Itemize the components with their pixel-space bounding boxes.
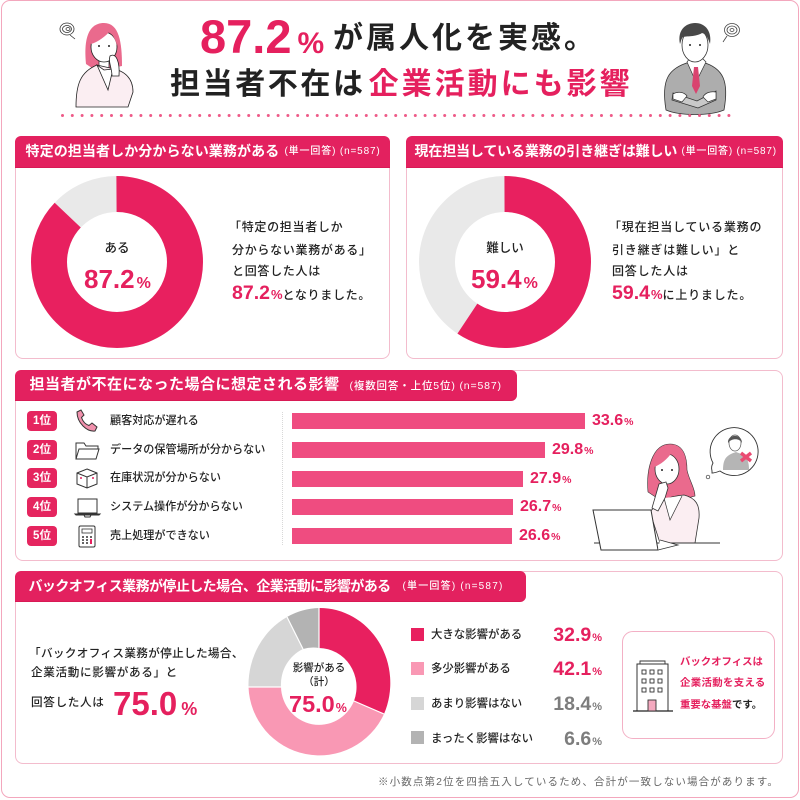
legend: あまり影響はない [431, 698, 522, 710]
panel: handover difficulty [406, 136, 783, 359]
dotted divider [61, 114, 730, 117]
callout text: 重要な基盤です。 [680, 700, 762, 711]
impact list labels [110, 414, 265, 542]
title [170, 10, 633, 101]
legend: 大きな影響がある [431, 629, 522, 641]
text block: panel 2 summary: 回答した人は [612, 264, 689, 278]
title line 1 text: が属人化を実感。 [333, 22, 597, 55]
icon: laptop [74, 498, 102, 518]
legend: まったく影響はない [431, 733, 533, 745]
badge 5 [27, 526, 57, 546]
legend [411, 624, 602, 750]
panel header: 担当者が不在になった場合に想定される影響 [30, 376, 340, 392]
illustration: worried woman on phone [60, 22, 134, 108]
legend item 3 [411, 697, 424, 710]
impact list labels: 在庫状況が分からない [110, 472, 221, 484]
panel: assumed impacts [15, 370, 783, 561]
donut chart: 59.4% [419, 176, 591, 348]
legend: 多少影響がある [431, 663, 511, 675]
legend item 4 [411, 731, 424, 744]
legend: 18.4% [553, 693, 602, 715]
panel: specific person only [15, 136, 390, 359]
ranking badges [27, 411, 57, 546]
legend: 42.1% [553, 658, 602, 680]
badge 4: 4位 [33, 501, 51, 513]
impact list labels: 顧客対応が遅れる [110, 415, 199, 427]
icon: phone [76, 409, 98, 432]
legend: 6.6% [564, 728, 602, 750]
value 2: 29.8% [552, 441, 593, 458]
footnote: ※小数点第2位を四捨五入しているため、合計が一致しない場合があります。 [378, 776, 779, 788]
panel header [14, 570, 526, 602]
text block: panel 2 summary: 「現在担当している業務の [609, 220, 762, 234]
illustration: woman thinking at laptop [592, 427, 759, 550]
label word: ある [104, 241, 130, 255]
panel: back office stoppage [15, 571, 783, 764]
panel header [406, 136, 782, 168]
label value: 59.4% [471, 264, 538, 294]
value 5: 26.6% [519, 527, 560, 544]
legend item 1 [411, 628, 424, 641]
title line 1: 87.2% [200, 10, 324, 63]
donut label: aru [84, 241, 151, 294]
badge 4 [27, 497, 57, 517]
bar 1 [292, 413, 585, 429]
bar 4 [292, 499, 513, 515]
label word: 難しい [486, 241, 524, 255]
panel header: 現在担当している業務の引き継ぎは難しい [414, 142, 677, 158]
text block: panel 1 summary: と回答した人は [232, 264, 321, 278]
label total: （計） [303, 676, 335, 688]
donut label: difficult [471, 241, 538, 294]
text block: back office summary: 企業活動に影響がある」と [31, 666, 178, 679]
text block: panel 1 summary: 「特定の担当者しか [229, 220, 343, 234]
donut label: total [289, 662, 347, 717]
icon: box [76, 468, 98, 488]
impact list labels: 売上処理ができない [110, 530, 210, 542]
label value: 87.2% [84, 264, 151, 294]
panel header [14, 136, 390, 168]
badge 3: 3位 [33, 472, 51, 484]
panel header: 特定の担当者しか分からない業務がある [26, 142, 279, 158]
icon: office building [633, 660, 673, 712]
callout: back office foundation [622, 631, 775, 739]
bar 2 [292, 442, 545, 458]
value 4: 26.7% [520, 498, 561, 515]
text block: panel 1 summary: 分からない業務がある」 [232, 243, 372, 257]
text block: panel 2 summary [609, 220, 762, 304]
text block: panel 1 summary: 87.2%となりました。 [232, 282, 371, 304]
legend: 32.9% [553, 624, 602, 646]
badge 3 [27, 468, 57, 488]
text block: back office summary: 回答した人は [31, 696, 104, 709]
bar 5 [292, 528, 512, 544]
label value: 75.0% [289, 691, 347, 717]
value 1: 33.6% [592, 412, 633, 429]
badge 1: 1位 [33, 415, 51, 427]
title line 2: 担当者不在は企業活動にも影響 [170, 68, 633, 101]
text block: panel 2 summary: 59.4%に上りました。 [612, 282, 752, 304]
big value 75.0%: 75.0% [113, 685, 197, 722]
text block: back office summary [29, 647, 244, 722]
badge 1 [27, 411, 57, 431]
badge 5: 5位 [33, 530, 51, 542]
bar 3 [292, 471, 523, 487]
donut chart: 87.2% [31, 176, 203, 348]
icon: folder [75, 442, 100, 460]
panel header: (単一回答) (n=587) [284, 146, 381, 156]
panel header: (単一回答) (n=587) [402, 580, 504, 592]
text block: panel 2 summary: 引き継ぎは難しい」と [612, 243, 740, 257]
callout text [680, 656, 766, 711]
value 3: 27.9% [530, 470, 571, 487]
legend item 2 [411, 662, 424, 675]
donut chart: impact breakdown [248, 608, 390, 756]
bar chart [282, 412, 634, 545]
panel header: (単一回答) (n=587) [682, 146, 777, 156]
callout text: 企業活動を支える [680, 678, 766, 689]
icon: calculator [78, 526, 96, 548]
label words: 影響がある [293, 662, 345, 674]
illustration: man with crossed arms [664, 23, 740, 115]
badge 2: 2位 [33, 444, 51, 456]
panel header: (複数回答・上位5位) (n=587) [350, 380, 502, 392]
callout text: バックオフィスは [680, 657, 763, 668]
text block: panel 1 summary [229, 220, 372, 304]
text block: back office summary: 「バックオフィス業務が停止した場合、 [29, 647, 244, 660]
impact list labels: データの保管場所が分からない [110, 444, 265, 456]
impact list labels: システム操作が分からない [110, 501, 243, 513]
badge 2 [27, 440, 57, 460]
panel header: バックオフィス業務が停止した場合、企業活動に影響がある [28, 578, 391, 594]
panel header [14, 370, 516, 400]
